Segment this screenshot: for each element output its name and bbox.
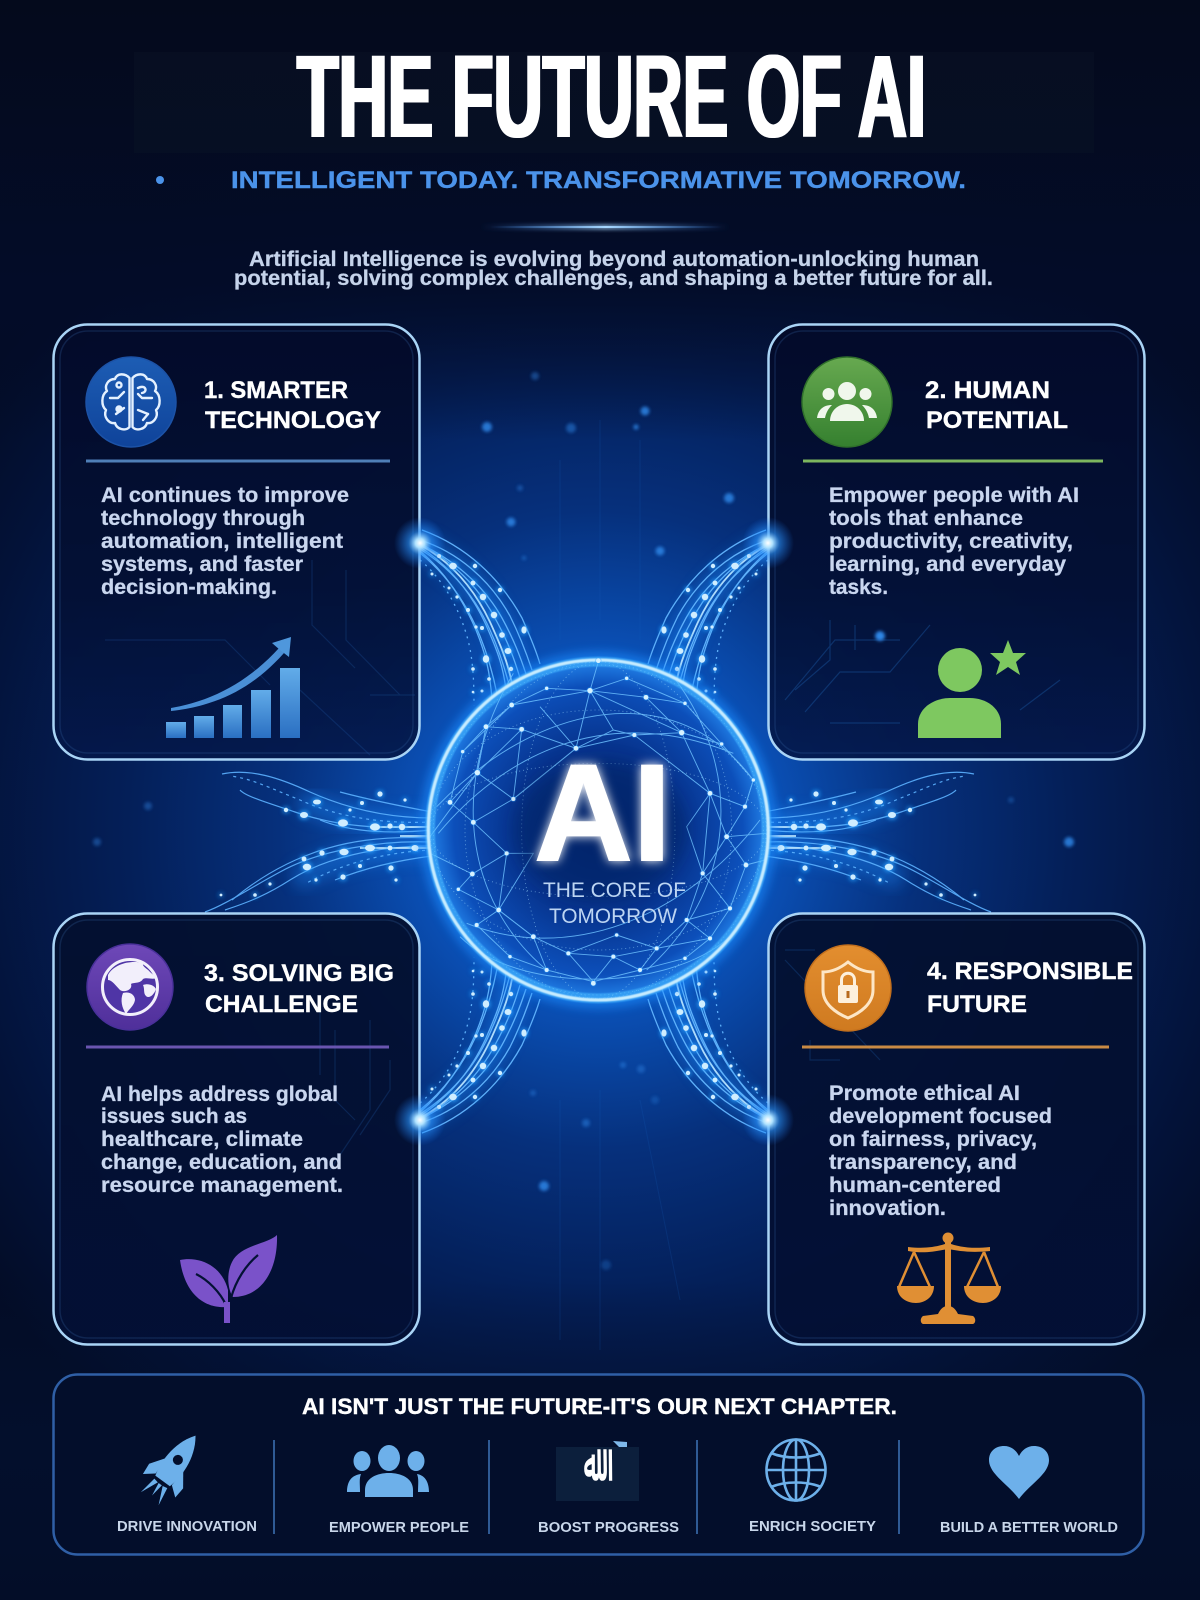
heading: TECHNOLOGY bbox=[205, 407, 381, 434]
banner headline: AI ISN'T JUST THE FUTURE-IT'S OUR NEXT CHAPTER. bbox=[302, 1394, 897, 1419]
icon: globe bbox=[87, 944, 173, 1030]
body text: decision-making. bbox=[101, 576, 277, 599]
core caption: THE CORE OF bbox=[543, 879, 686, 902]
body text bbox=[829, 1082, 1052, 1220]
body text: AI continues to improve bbox=[101, 484, 349, 507]
body text bbox=[101, 1083, 343, 1197]
icon: person with star bbox=[918, 640, 1026, 738]
panel: solving big challenge bbox=[54, 914, 420, 1344]
panel: smarter technology bbox=[54, 324, 420, 760]
intro text: potential, solving complex challenges, and shaping a better future for all. bbox=[234, 266, 993, 290]
body text: resource management. bbox=[101, 1174, 343, 1197]
icon: brain bbox=[86, 357, 176, 447]
title band bbox=[134, 52, 1094, 153]
heading: CHALLENGE bbox=[205, 991, 358, 1018]
glowing divider bbox=[480, 224, 730, 230]
label: ENRICH SOCIETY bbox=[749, 1519, 876, 1535]
body text: on fairness, privacy, bbox=[829, 1128, 1037, 1151]
icon: rocket bbox=[133, 1423, 213, 1511]
panel: human potential bbox=[768, 324, 1144, 760]
subtitle: INTELLIGENT TODAY. TRANSFORMATIVE TOMORROW. bbox=[231, 167, 966, 194]
heading: 2. HUMAN bbox=[925, 377, 1050, 404]
body text: AI helps address global bbox=[101, 1083, 338, 1106]
body text: automation, intelligent bbox=[101, 530, 343, 553]
icon: calligraphy box: ﷲ bbox=[584, 1434, 613, 1493]
body text: issues such as bbox=[101, 1105, 247, 1128]
heading bbox=[925, 377, 1068, 434]
panel: responsible future bbox=[768, 914, 1144, 1344]
central AI sphere bbox=[420, 652, 777, 1008]
icon: growth bar chart bbox=[166, 637, 300, 738]
heading bbox=[927, 958, 1133, 1018]
intro text: Artificial Intelligence is evolving beyond automation-unlocking human bbox=[249, 247, 979, 271]
heading: POTENTIAL bbox=[926, 407, 1068, 434]
icon: heart bbox=[989, 1446, 1049, 1499]
body text: transparency, and bbox=[829, 1151, 1017, 1174]
AI letters: AI bbox=[534, 734, 671, 891]
body text: systems, and faster bbox=[101, 553, 303, 576]
body text: tasks. bbox=[829, 576, 888, 599]
label: EMPOWER PEOPLE bbox=[329, 1520, 469, 1536]
body text: productivity, creativity, bbox=[829, 530, 1073, 553]
body text: Empower people with AI bbox=[829, 484, 1079, 507]
icon: globe grid bbox=[766, 1440, 826, 1500]
heading: 4. RESPONSIBLE bbox=[927, 958, 1133, 985]
body text: human-centered bbox=[829, 1174, 1001, 1197]
body text: learning, and everyday bbox=[829, 553, 1066, 576]
icon: leaves bbox=[180, 1235, 277, 1323]
body text bbox=[829, 484, 1079, 599]
heading: 3. SOLVING BIG bbox=[204, 960, 394, 987]
heading: 1. SMARTER bbox=[204, 377, 348, 404]
heading bbox=[204, 960, 394, 1018]
panel: bottom banner bbox=[54, 1374, 1144, 1554]
label: BUILD A BETTER WORLD bbox=[940, 1520, 1118, 1536]
body text: change, education, and bbox=[101, 1151, 342, 1174]
heading: FUTURE bbox=[927, 991, 1027, 1018]
icon: people bbox=[347, 1445, 429, 1497]
icon: people bbox=[802, 357, 892, 447]
connector filaments bbox=[205, 530, 991, 1133]
heading bbox=[204, 377, 381, 434]
core caption: TOMORROW bbox=[549, 905, 677, 928]
body text bbox=[101, 484, 349, 599]
icon: shield lock bbox=[805, 945, 891, 1031]
icon: scales of justice bbox=[897, 1232, 1001, 1324]
node glows bbox=[394, 517, 794, 1146]
body text: technology through bbox=[101, 507, 305, 530]
subtitle bullet bbox=[156, 176, 164, 184]
body text: healthcare, climate bbox=[101, 1128, 303, 1151]
icon: calligraphy box bbox=[556, 1434, 639, 1501]
label: BOOST PROGRESS bbox=[538, 1520, 679, 1536]
body text: Promote ethical AI bbox=[829, 1082, 1020, 1105]
label: DRIVE INNOVATION bbox=[117, 1519, 257, 1535]
body text: tools that enhance bbox=[829, 507, 1023, 530]
body text: development focused bbox=[829, 1105, 1052, 1128]
body text: innovation. bbox=[829, 1197, 946, 1220]
intro text bbox=[234, 247, 993, 290]
core caption bbox=[543, 879, 686, 928]
